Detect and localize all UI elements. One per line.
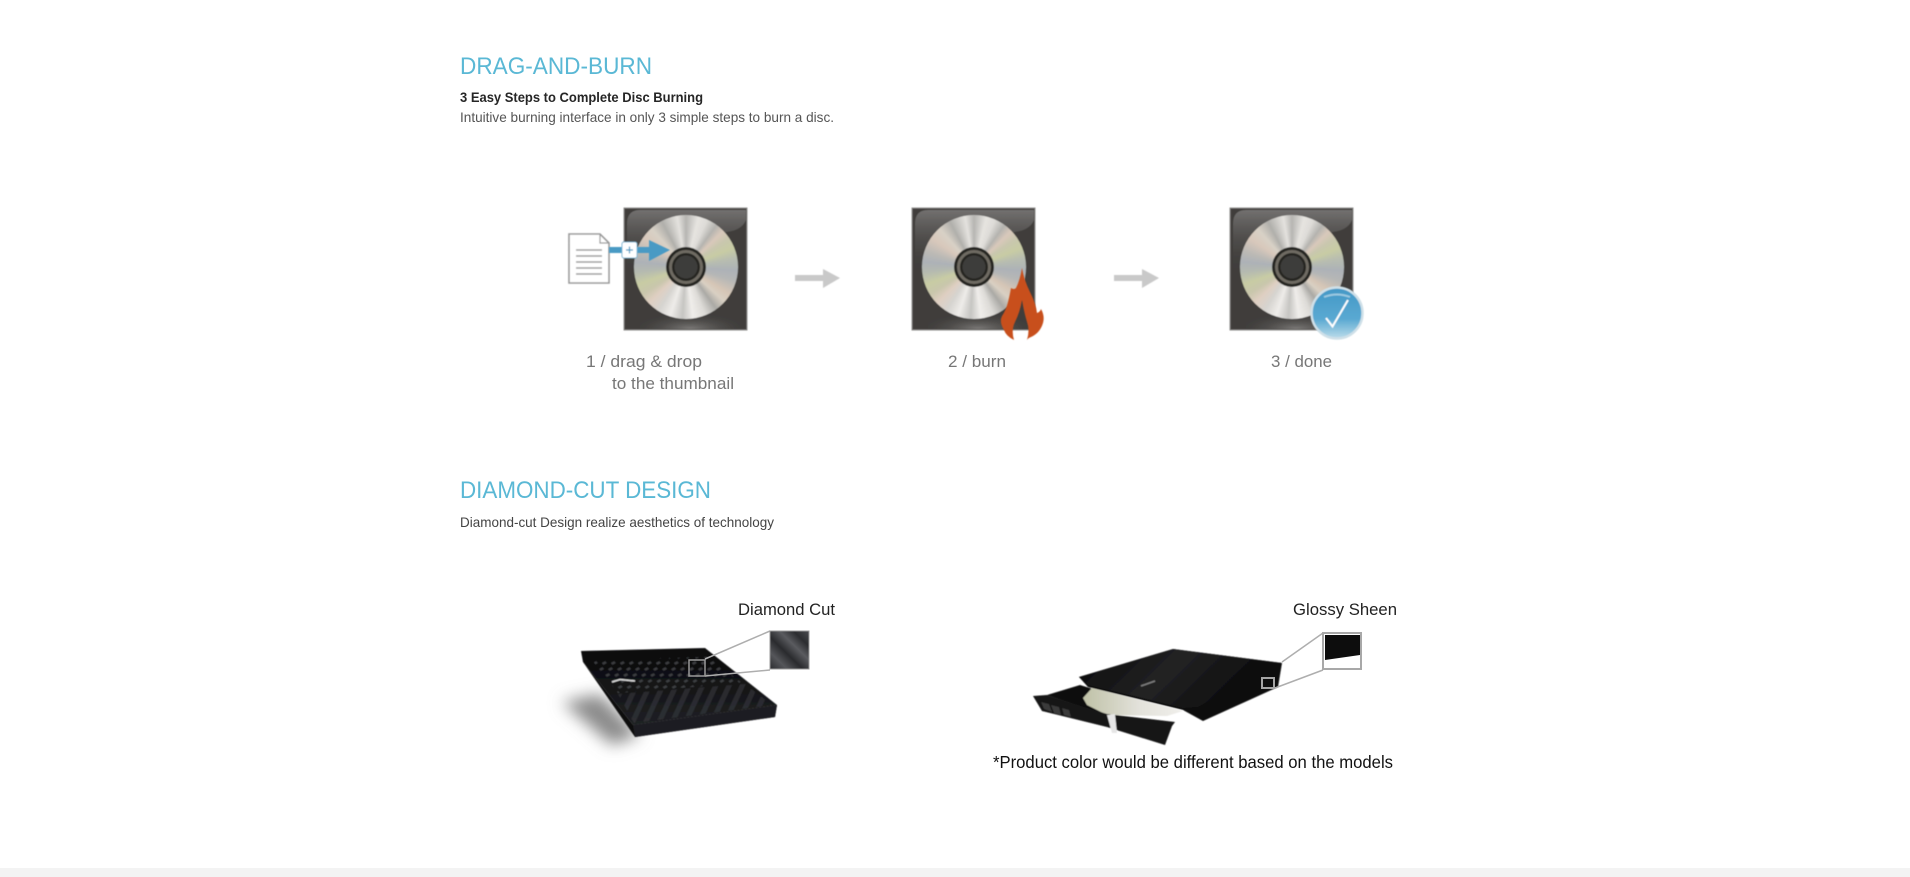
label: diamond cut: Diamond Cut	[738, 600, 835, 619]
icon: disc case 1	[624, 208, 747, 330]
product: diamond cut drive	[562, 600, 835, 745]
open tray drive	[1033, 649, 1282, 745]
label: glossy sheen: Glossy Sheen	[1293, 600, 1397, 619]
label: step 3: 3 / done	[1271, 352, 1332, 371]
drop shadow	[562, 694, 640, 745]
icon: document	[569, 234, 609, 283]
description: burning interface: Intuitive burning interface in only 3 simple steps to burn a disc.	[460, 109, 834, 125]
title: diamond-cut design: DIAMOND-CUT DESIGN	[460, 477, 711, 504]
label: step 2: 2 / burn	[948, 352, 1006, 371]
icon: flame	[1001, 268, 1044, 340]
note: product color: *Product color would be different based on the models	[993, 752, 1393, 772]
step 1: drag and drop	[569, 208, 747, 393]
label: step 1	[586, 352, 734, 393]
arrow: step 1 to step 2	[795, 269, 840, 288]
product: glossy sheen drive	[993, 600, 1397, 772]
subheading: three easy steps: 3 Easy Steps to Complete Disc Burning	[460, 90, 703, 105]
icon: disc case 2	[912, 208, 1035, 330]
section: diamond-cut heading	[460, 477, 774, 530]
step 3: done	[1230, 208, 1362, 371]
callout: glossy sheen zoom	[1262, 633, 1361, 688]
callout: diamond cut zoom	[689, 631, 809, 676]
icon: check badge	[1312, 288, 1362, 338]
description: diamond-cut: Diamond-cut Design realize aesthetics of technology	[460, 514, 774, 530]
drive body	[581, 648, 777, 737]
section: drag-and-burn heading	[460, 53, 834, 125]
label: step 1: 1 / drag & drop	[586, 352, 702, 371]
icon: blue drag arrow	[609, 240, 670, 261]
arrow: step 2 to step 3	[1114, 269, 1159, 288]
title: drag-and-burn: DRAG-AND-BURN	[460, 53, 652, 80]
footer band	[0, 868, 1910, 877]
label: step 1: to the thumbnail	[612, 374, 734, 393]
step 2: burn	[912, 208, 1044, 371]
icon: disc case 3	[1230, 208, 1353, 330]
